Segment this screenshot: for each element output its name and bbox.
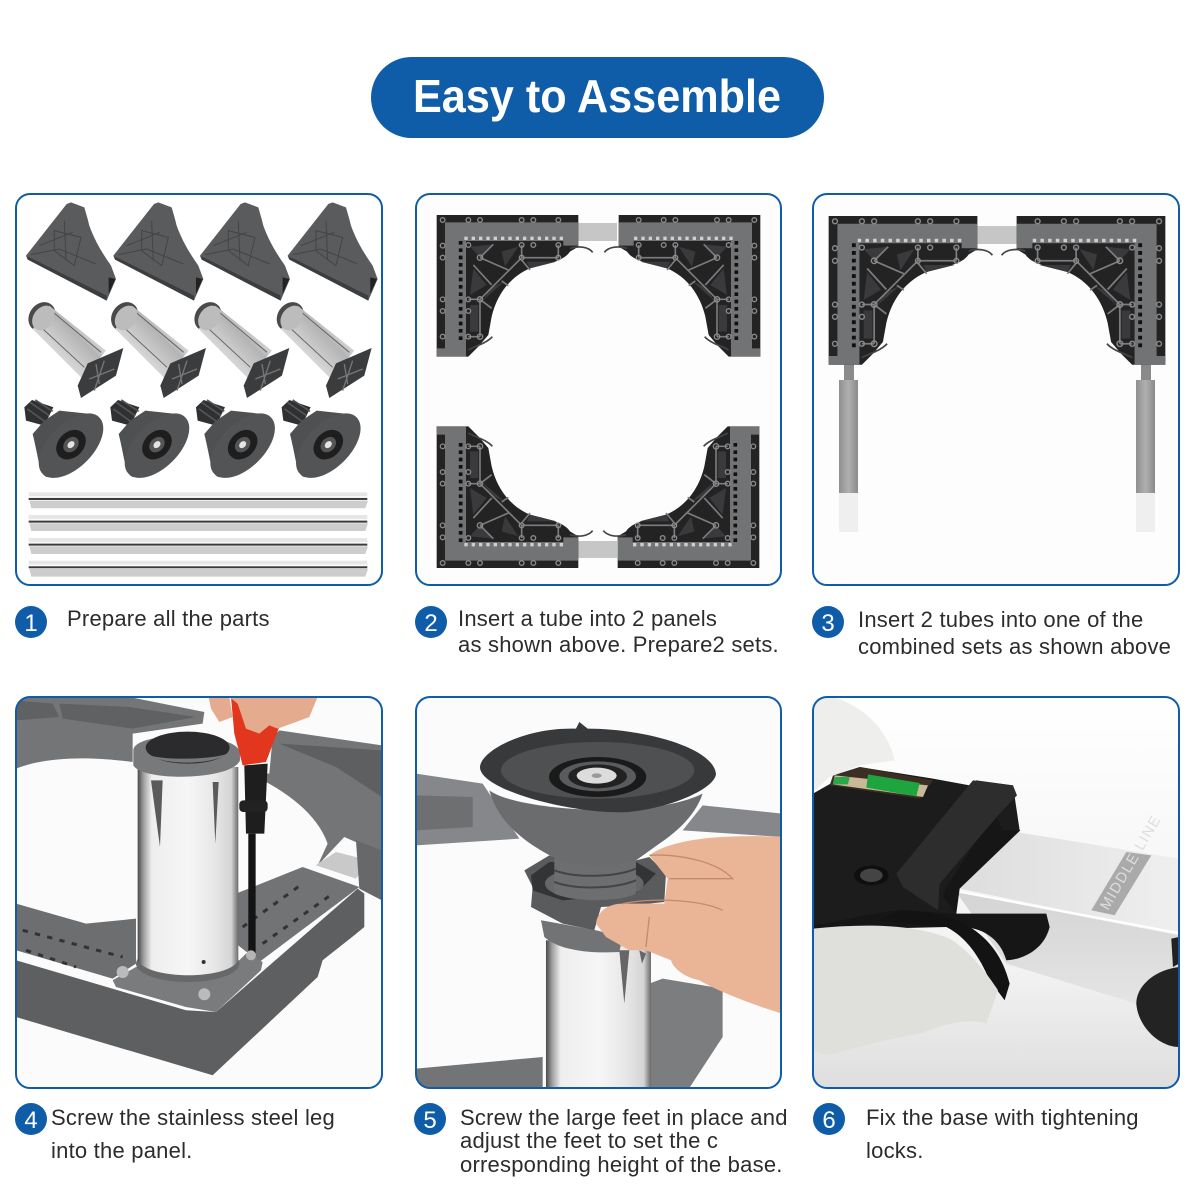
step 6 caption (813, 1103, 1139, 1163)
panel: step 2 tube joins panels (416, 194, 781, 585)
step 6 caption: locks. (866, 1138, 924, 1163)
black clamp (813, 767, 1179, 1047)
row of steel legs (23, 297, 372, 398)
step 4 caption: Screw the stainless steel leg (51, 1105, 335, 1130)
title: Easy to Assemble (413, 70, 781, 122)
step 5 caption: adjust the feet to set the c (460, 1128, 718, 1153)
rubber foot (480, 722, 716, 865)
front frame (16, 867, 364, 1075)
step 3 caption: 3 (821, 610, 835, 637)
row of plastic panels (26, 202, 378, 301)
steel tube (956, 813, 1179, 1017)
step 6 caption: Fix the base with tightening (866, 1105, 1139, 1130)
panel: step 3 tubes inserted (813, 194, 1179, 585)
row of feet (24, 400, 372, 489)
white glove bottom (813, 926, 998, 1055)
panel: step 5 fit feet (416, 697, 782, 1088)
step 1 caption: 1 (24, 610, 38, 637)
step 3 caption: Insert 2 tubes into one of the (858, 607, 1143, 632)
step 6 caption: 6 (822, 1107, 836, 1134)
step 1 caption (15, 606, 270, 638)
hand (596, 836, 782, 1014)
panel: step 6 border (813, 697, 1179, 1088)
steel tube: MIDDLE LINE (1098, 813, 1165, 913)
step 3 caption (812, 606, 1171, 659)
panel: step 1 parts (16, 194, 382, 585)
step 5 caption: Screw the large feet in place and (460, 1105, 788, 1130)
title (371, 57, 824, 138)
hand (209, 697, 318, 734)
white glove top (813, 697, 895, 792)
step 2 caption: Insert a tube into 2 panels (458, 606, 717, 631)
panel: step 6 tightening lock (813, 697, 1179, 1088)
step 5 caption: 5 (423, 1107, 437, 1134)
panel: step 4 border (16, 697, 382, 1088)
panel: step 4 screw leg (16, 697, 382, 1088)
steel rails (29, 492, 368, 577)
red screwdriver (231, 697, 279, 960)
blurred frame pieces (416, 774, 782, 1088)
step 3 caption: combined sets as shown above (858, 634, 1171, 659)
back frame (16, 697, 382, 900)
step 2 caption (415, 606, 779, 657)
step 5 caption: orresponding height of the base. (460, 1152, 783, 1177)
step 4 caption: into the panel. (51, 1138, 193, 1163)
step 4 caption (15, 1103, 335, 1163)
step 2 caption: 2 (424, 610, 438, 637)
step 1 caption: Prepare all the parts (67, 606, 270, 631)
panel: step 5 border (416, 697, 781, 1088)
step 4 caption: 4 (24, 1107, 38, 1134)
steel leg (133, 732, 240, 982)
step 2 caption: as shown above. Prepare2 sets. (458, 632, 779, 657)
spirit level (830, 767, 933, 799)
step 5 caption (414, 1103, 788, 1177)
threaded nut (524, 855, 666, 930)
steel leg (541, 920, 651, 1088)
